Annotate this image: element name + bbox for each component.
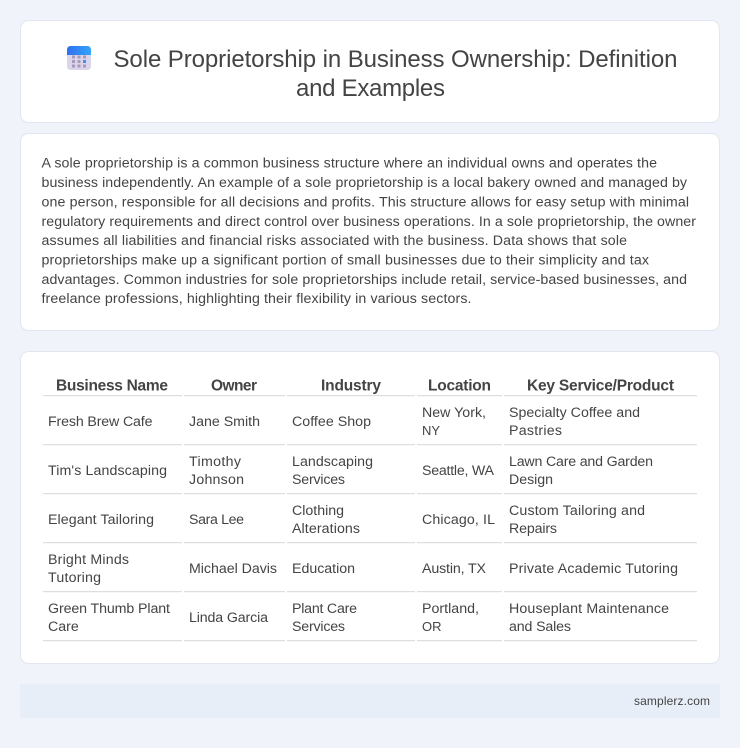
- panel: business table: [20, 352, 720, 664]
- heading: [114, 46, 678, 102]
- table row: Fresh Brew Cafe: NY: [422, 423, 440, 438]
- table row: Bright Minds Tutoring: Bright Minds: [48, 552, 129, 568]
- table header row: Owner: [211, 378, 257, 394]
- text block: description paragraph: one person, responsible for all decisions and profits. This structure allows for easy setup with minimal: [42, 194, 689, 210]
- text block: description paragraph: A sole proprietorship is a common business structure where an individual owns and operates the: [42, 156, 657, 172]
- table header row: Industry: [321, 378, 381, 394]
- table row: Fresh Brew Cafe: New York,: [422, 405, 486, 421]
- table row: Tim's Landscaping: Johnson: [189, 472, 244, 488]
- table row: Bright Minds Tutoring: Tutoring: [48, 570, 101, 586]
- icon: calendar: [67, 46, 91, 70]
- table row: Fresh Brew Cafe: Specialty Coffee and: [509, 405, 640, 421]
- table row: Elegant Tailoring: [48, 503, 645, 537]
- table header row: Location: [428, 378, 491, 394]
- footer bar: [20, 684, 720, 718]
- panel: description: [20, 134, 720, 330]
- table row: Tim's Landscaping: Lawn Care and Garden: [509, 454, 653, 470]
- table row: Green Thumb Plant Care: and Sales: [509, 619, 571, 635]
- table row: Elegant Tailoring: Repairs: [509, 521, 557, 537]
- table row: Green Thumb Plant Care: Houseplant Maintenance: [509, 601, 669, 617]
- table row: Green Thumb Plant Care: Plant Care: [292, 601, 357, 617]
- table header row: [56, 378, 674, 394]
- table row: Tim's Landscaping: [48, 454, 653, 488]
- table row: Green Thumb Plant Care: Portland,: [422, 601, 479, 617]
- text block: description paragraph: [42, 156, 696, 307]
- table header row: Key Service/Product: [527, 378, 674, 394]
- text block: description paragraph: freelance professions, highlighting their flexibility in various sectors.: [42, 291, 472, 307]
- table row: Tim's Landscaping: Design: [509, 472, 553, 488]
- text block: description paragraph: advantages. Common industries for sole proprietorships include retail, service-based businesses, and: [42, 272, 687, 288]
- heading: and Examples: [296, 75, 445, 102]
- panel: title card: [20, 20, 720, 122]
- table row: Tim's Landscaping: Landscaping: [292, 454, 373, 470]
- table row: Fresh Brew Cafe: [48, 405, 640, 439]
- text block: description paragraph: assumes all liabilities and financial risks associated with the business. Data shows that sole: [42, 233, 627, 249]
- table row: Elegant Tailoring: Alterations: [292, 521, 360, 537]
- table row: Green Thumb Plant Care: [48, 601, 669, 635]
- table row: Bright Minds Tutoring: Private Academic Tutoring: [509, 561, 678, 577]
- text block: description paragraph: regulatory requirements and direct control over business operations. In a sole proprietorship, the owner: [42, 214, 696, 230]
- table row: Elegant Tailoring: Chicago, IL: [422, 512, 495, 528]
- table row: Bright Minds Tutoring: Michael Davis: [189, 561, 277, 577]
- footer text: samplerz.com: [634, 694, 710, 708]
- table row: Green Thumb Plant Care: Green Thumb Plant: [48, 601, 170, 617]
- table row: Bright Minds Tutoring: [48, 552, 678, 586]
- table header row: Business Name: [56, 378, 168, 394]
- text block: description paragraph: proprietorships make up a significant portion of small businesses due to their simplicity and tax: [42, 252, 649, 268]
- table row: Green Thumb Plant Care: Services: [292, 619, 345, 635]
- table row: Fresh Brew Cafe: Pastries: [509, 423, 562, 439]
- table row: Green Thumb Plant Care: Linda Garcia: [189, 610, 268, 626]
- table row: Fresh Brew Cafe: Jane Smith: [189, 414, 260, 430]
- table row: Tim's Landscaping: Seattle, WA: [422, 463, 495, 479]
- table row: Green Thumb Plant Care: Care: [48, 619, 79, 635]
- table row: Elegant Tailoring: Custom Tailoring and: [509, 503, 645, 519]
- table row: Fresh Brew Cafe: Fresh Brew Cafe: [48, 414, 153, 430]
- table row: Bright Minds Tutoring: Austin, TX: [422, 561, 487, 577]
- table row: Bright Minds Tutoring: Education: [292, 561, 355, 577]
- table row: Tim's Landscaping: Tim's Landscaping: [48, 463, 167, 479]
- table row: Elegant Tailoring: Sara Lee: [189, 512, 244, 528]
- table row: Green Thumb Plant Care: OR: [422, 619, 442, 634]
- table row: Elegant Tailoring: Clothing: [292, 503, 344, 519]
- table row: Elegant Tailoring: Elegant Tailoring: [48, 512, 154, 528]
- table row: Fresh Brew Cafe: Coffee Shop: [292, 414, 371, 430]
- text block: description paragraph: business independently. An example of a sole proprietorship is a local bakery owned and managed by: [42, 175, 688, 191]
- table row: Tim's Landscaping: Services: [292, 472, 345, 488]
- heading: Sole Proprietorship in Business Ownership: Definition: [114, 46, 678, 73]
- table row: Tim's Landscaping: Timothy: [189, 454, 242, 470]
